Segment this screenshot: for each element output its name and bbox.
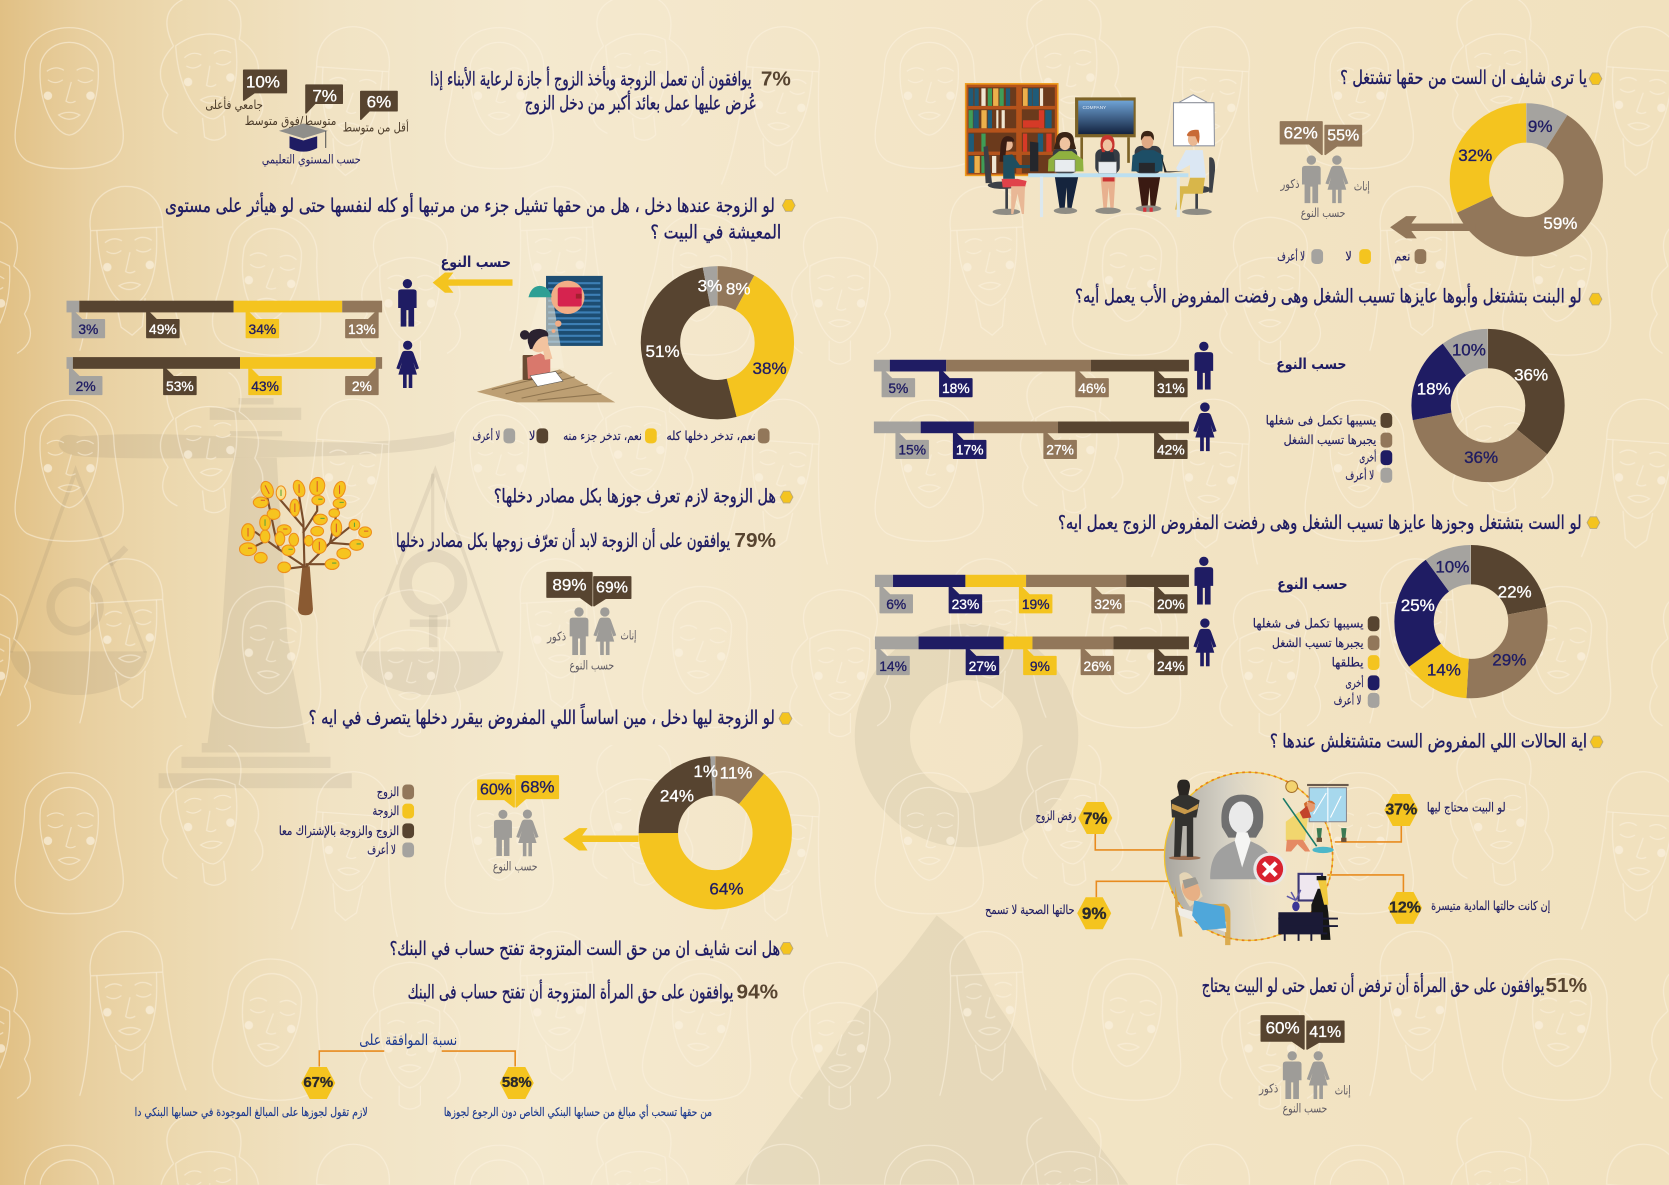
gender comparison: 89% — [552, 575, 586, 594]
by gender label: حسب النوع — [1276, 355, 1346, 373]
stat: must tell husband: لازم تقول لجوزها على المبالغ الموجودة في حسابها البنكي دا — [135, 1105, 368, 1120]
statement: 79 percent: 79% — [734, 529, 776, 552]
gender comparison: إناث — [621, 628, 637, 642]
panel: who decides how income is spent — [279, 704, 792, 898]
arrow — [563, 828, 639, 850]
legend: أخرى — [1345, 675, 1363, 691]
male bar: 13% — [348, 321, 376, 337]
statement: 79 percent: يوافقون على أن الزوجة لابد أن تعرّف زوجها بكل مصادر دخلها — [396, 528, 730, 552]
connector lines — [1095, 825, 1403, 897]
legend: لا — [1345, 250, 1352, 264]
person 2 — [1048, 132, 1084, 214]
panel: wife keeping her income — [67, 192, 795, 444]
gender comparison: حسب النوع — [1283, 1102, 1327, 1117]
bubbles by education: 10% — [246, 72, 280, 91]
donut chart: 38% — [753, 359, 787, 378]
gender comparison: 62% — [1284, 124, 1318, 143]
donut chart: 59% — [1543, 214, 1577, 233]
donut chart: 1% — [693, 762, 718, 781]
stat: husband refusal: 7% — [1083, 809, 1108, 828]
donut chart: 8% — [726, 279, 750, 298]
stat: home needs her: 37% — [1385, 802, 1417, 819]
female bar: 43% — [251, 378, 279, 394]
donut chart: 32% — [1458, 146, 1492, 165]
female bar: 42% — [1157, 442, 1185, 458]
statement: 51 percent: 51% — [1545, 974, 1587, 997]
stat: may withdraw money: 58% — [502, 1075, 532, 1091]
stat: husband refusal: رفض الزوج — [1036, 809, 1076, 824]
male bar: 23% — [952, 596, 979, 612]
stat: financially comfortable: 12% — [1389, 899, 1421, 916]
panel: married woman's bank account — [135, 937, 793, 1120]
by gender label: حسب النوع — [441, 253, 511, 271]
donut chart: 14% — [1427, 661, 1461, 680]
gender comparison: 41% — [1309, 1024, 1341, 1041]
gender comparison: إناث — [1354, 179, 1370, 193]
heading: المعيشة في البيت ؟ — [650, 221, 781, 244]
arrow — [433, 272, 513, 293]
heading: اية الحالات اللي المفروض الست متشتغلش عندها ؟ — [1270, 729, 1587, 752]
gender comparison: حسب النوع — [493, 859, 538, 874]
stat: health condition — [985, 897, 1111, 929]
icon: sick woman in bed — [1175, 872, 1230, 945]
illustration: office team: COMPANY — [1082, 105, 1107, 111]
donut chart: 18% — [1417, 380, 1451, 399]
donut chart: 36% — [1514, 366, 1548, 385]
donut chart: 29% — [1492, 650, 1526, 669]
female bar: 17% — [956, 442, 984, 458]
female bar — [875, 618, 1216, 674]
donut chart — [1417, 341, 1548, 467]
female bar: 2% — [76, 378, 96, 394]
female bar: 27% — [1046, 442, 1074, 458]
legend: نعم — [1394, 250, 1410, 264]
stat: financially comfortable — [1388, 892, 1550, 924]
stat: home needs her: لو البيت محتاج ليها — [1427, 800, 1506, 815]
stat: must tell husband: 67% — [303, 1075, 333, 1091]
panel: cases where women should not work — [985, 729, 1603, 1117]
illustration: office team — [965, 83, 1215, 217]
donut chart — [1458, 117, 1583, 237]
background: justice scale silhouette — [10, 398, 503, 788]
icon: wealthy woman at desk — [1278, 874, 1338, 941]
female bar: 9% — [1030, 658, 1050, 674]
gender comparison — [546, 573, 637, 673]
icon: red cross — [1253, 853, 1286, 886]
gender comparison: إناث — [1335, 1083, 1351, 1097]
bubbles by education: أقل من متوسط — [343, 120, 409, 136]
statement: 7 percent: يوافقون أن تعمل الزوجة ويأخذ الزوج أ جازة لرعاية الأبناء إذا — [430, 65, 751, 91]
legend: الزوج والزوجة بالإشتراك معا — [279, 824, 399, 839]
female bar: 27% — [969, 658, 996, 674]
icon: graduation cap — [279, 123, 328, 152]
legend: يجبرها تسيب الشغل — [1284, 433, 1376, 448]
panel: women's right to work — [965, 66, 1602, 265]
donut chart: 25% — [1401, 596, 1435, 615]
stat: may withdraw money: من حقها تسحب أي مبالغ من حسابها البنكي الخاص دون الرجوع لجوزها — [444, 1104, 712, 1120]
legend: لا أعرف — [1334, 692, 1361, 708]
statement: 7 percent: 7% — [761, 67, 791, 90]
donut chart: 22% — [1498, 582, 1532, 601]
gender comparison: حسب النوع — [569, 658, 614, 673]
donut chart: 10% — [1435, 557, 1469, 576]
donut chart: 36% — [1464, 448, 1498, 467]
gender comparison: ذكور — [1258, 1081, 1278, 1096]
arrow — [1390, 216, 1475, 238]
legend: نعم، تدخر جزء منه — [563, 429, 642, 444]
legend: لا أعرف — [1345, 467, 1374, 483]
male bar: 32% — [1094, 596, 1122, 612]
bubbles by education: متوسط/فوق متوسط — [245, 114, 336, 129]
bubbles by education — [205, 70, 409, 136]
stat: home needs her — [1384, 794, 1506, 826]
donut chart — [646, 276, 787, 400]
male bar: 49% — [149, 321, 177, 337]
illustration: money tree — [239, 476, 371, 615]
legend: الزوجة — [373, 804, 399, 819]
bubbles by education: 7% — [312, 86, 337, 105]
heading: هل انت شايف ان من حق الست المتزوجة تفتح حساب في البنك؟ — [390, 937, 780, 960]
stat: financially comfortable: إن كانت حالتها المادية متيسرة — [1431, 899, 1550, 914]
gender comparison: 60% — [1266, 1019, 1300, 1038]
icon: woman with suit — [1210, 795, 1274, 879]
by gender label: حسب النوع — [1277, 575, 1348, 593]
background: female symbol and raised hands silhouette — [734, 624, 1128, 1185]
gender comparison: 68% — [520, 778, 555, 797]
male bar: 6% — [886, 596, 906, 612]
gender comparison: ذكور — [1280, 177, 1300, 192]
legend: لا أعرف — [473, 428, 500, 444]
male bar — [875, 557, 1213, 613]
male bar: 18% — [942, 380, 970, 396]
stat: health condition: حالتها الصحية لا تسمح — [985, 903, 1075, 918]
male bar: 5% — [888, 380, 908, 396]
heading: يا ترى شايف ان الست من حقها تشتغل ؟ — [1340, 66, 1587, 89]
legend — [1253, 616, 1379, 708]
statement: 7 percent — [430, 65, 791, 115]
gender comparison — [1280, 122, 1370, 221]
heading: هل الزوجة لازم تعرف جوزها بكل مصادر دخلها؟ — [494, 485, 776, 508]
legend: لا — [529, 429, 535, 443]
legend: يجبرها تسيب الشغل — [1272, 636, 1363, 651]
stat: husband refusal — [1036, 802, 1112, 834]
male bar: 19% — [1022, 596, 1050, 612]
gender comparison: حسب النوع — [1301, 206, 1345, 221]
donut chart: 10% — [1452, 341, 1486, 360]
legend — [1266, 413, 1392, 483]
male bar — [874, 342, 1213, 396]
gender comparison — [1258, 1016, 1351, 1117]
icon: woman cleaning — [1283, 781, 1349, 853]
gender comparison — [478, 776, 558, 874]
donut chart: 9% — [1528, 117, 1552, 136]
female bar: 26% — [1084, 658, 1111, 674]
female bar: 53% — [166, 378, 194, 394]
donut chart: 3% — [698, 276, 722, 295]
male bar: 31% — [1157, 380, 1185, 396]
legend: يطلقها — [1332, 656, 1363, 671]
legend: يسيبها تكمل فى شغلها — [1253, 617, 1363, 632]
stat: must tell husband — [135, 1067, 368, 1120]
person 3 — [1095, 135, 1121, 214]
gender comparison: ذكور — [546, 630, 566, 645]
legend — [473, 428, 770, 444]
heading — [165, 192, 795, 244]
female bar: 14% — [879, 658, 907, 674]
donut chart — [1401, 557, 1532, 680]
statement: 94 percent: 94% — [737, 981, 778, 1004]
person 1 — [984, 136, 1038, 215]
male bar: 46% — [1078, 380, 1106, 396]
heading: لو الزوجة ليها دخل ، مين اساساً اللي المفروض بيقرر دخلها يتصرف في ايه ؟ — [309, 704, 775, 729]
agreement label: نسبة الموافقة على — [359, 1031, 457, 1049]
legend: لا أعرف — [367, 842, 396, 858]
gender comparison: 55% — [1327, 128, 1359, 145]
person 4 — [1131, 131, 1163, 212]
female bar — [874, 402, 1217, 458]
panel: wife and husband question — [875, 511, 1600, 708]
stat: may withdraw money — [444, 1067, 712, 1120]
icon: stern husband — [1169, 780, 1201, 860]
panel: should wife disclose income — [239, 476, 793, 673]
bubbles by education: جامعي فأعلى — [205, 96, 263, 112]
legend: الزوج — [377, 785, 399, 800]
bubbles by education: 6% — [367, 93, 391, 112]
male bar — [67, 279, 417, 337]
stat: health condition: 9% — [1082, 904, 1106, 923]
statement: 7 percent: عُرض عليها عمل بعائد أكبر من دخل الزوج — [525, 91, 757, 115]
legend: أخرى — [1359, 450, 1376, 466]
legend — [279, 784, 414, 858]
female bar: 24% — [1157, 658, 1185, 674]
illustration: circle of cases — [1164, 772, 1349, 945]
person 5 — [1161, 130, 1215, 215]
donut chart: 11% — [720, 763, 752, 782]
male bar: 3% — [78, 321, 98, 337]
illustration: woman with wallet — [477, 276, 615, 402]
male bar: 34% — [249, 321, 276, 337]
education label: حسب المستوي التعليمي — [262, 153, 361, 168]
legend: لا أعرف — [1277, 249, 1305, 265]
male bar: 20% — [1157, 596, 1185, 612]
gender comparison: 60% — [480, 781, 512, 798]
legend — [1277, 249, 1426, 265]
donut chart: 51% — [646, 342, 680, 361]
female bar — [67, 341, 419, 394]
gender comparison: 69% — [596, 580, 628, 597]
legend: يسيبها تكمل فى شغلها — [1266, 413, 1376, 428]
donut chart: 24% — [660, 787, 694, 806]
donut chart — [658, 762, 772, 898]
female bar: 15% — [898, 442, 926, 458]
statement: 94 percent: يوافقون على حق المرأة المتزوجة أن تفتح حساب فى البنك — [408, 980, 733, 1004]
female bar: 2% — [352, 378, 372, 394]
panel: accepting leave when wife earns more — [205, 65, 791, 168]
connector lines — [319, 1051, 515, 1067]
heading: لو الزوجة عندها دخل ، هل من حقها تشيل جزء من مرتبها أو كله لنفسها حتى لو هيأثر على مستوى — [165, 192, 775, 217]
legend: نعم، تدخر دخلها كله — [666, 429, 756, 444]
panel: daughter and father question — [874, 283, 1602, 483]
donut chart: 64% — [709, 879, 743, 898]
